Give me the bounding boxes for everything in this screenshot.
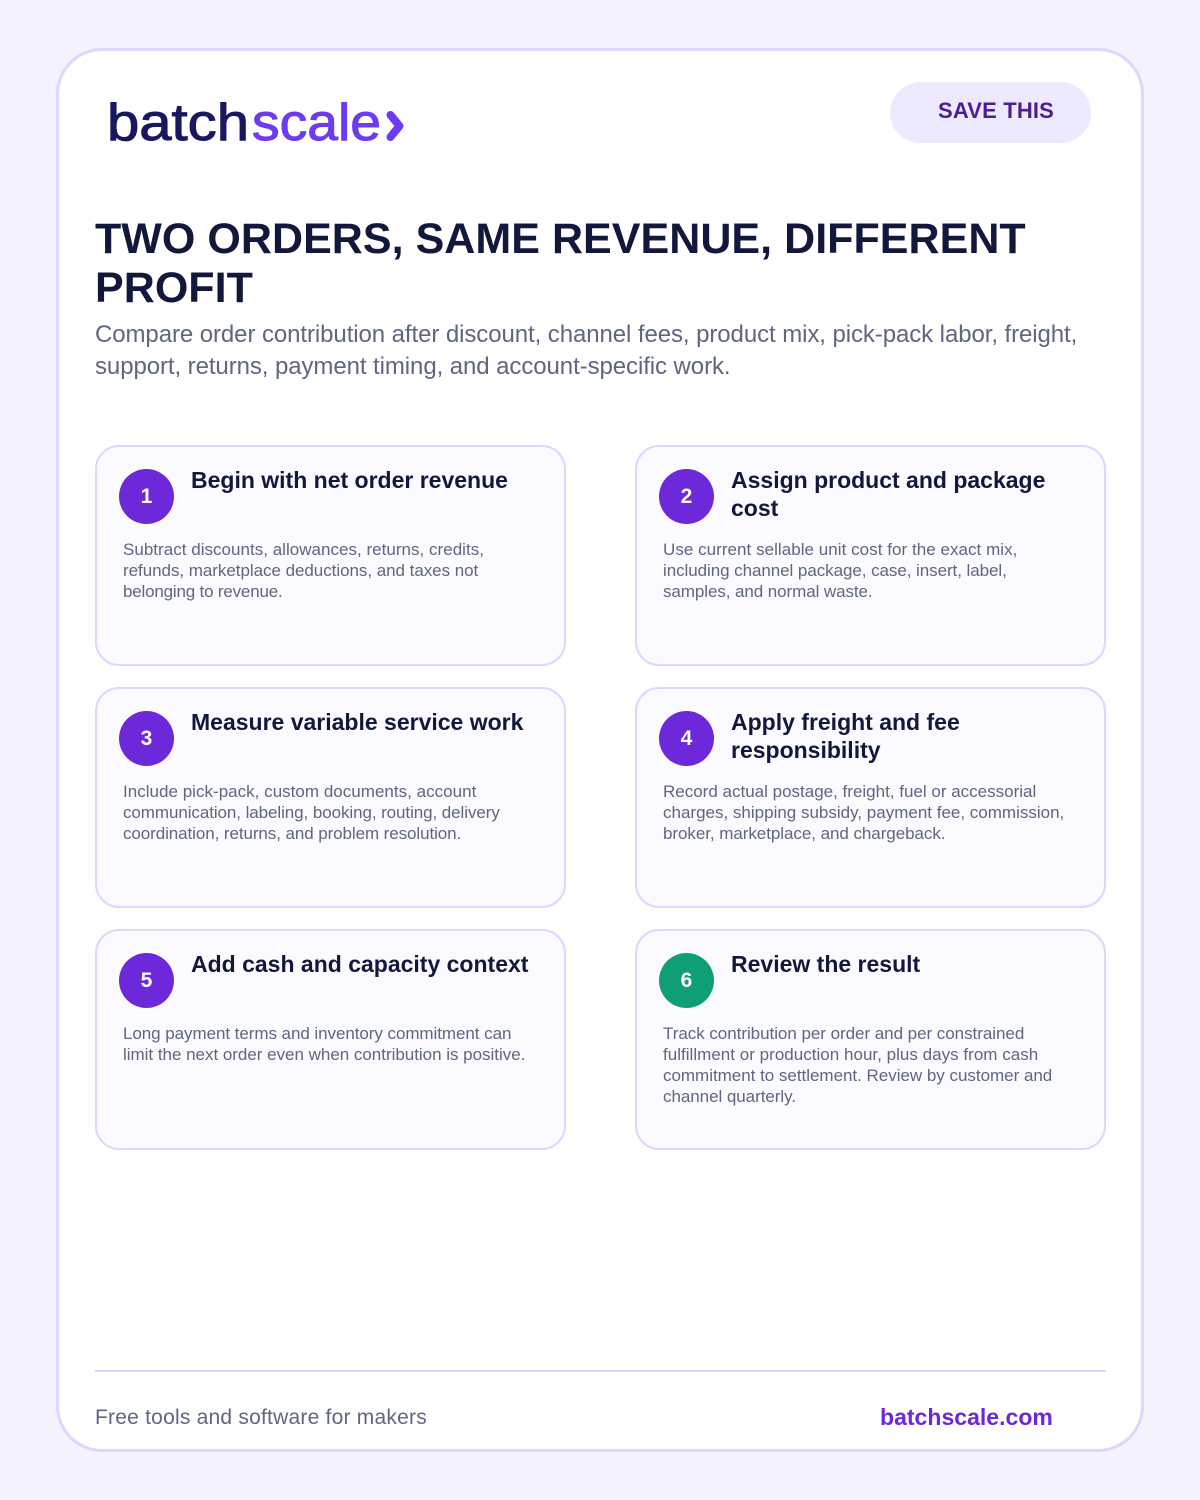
step 3 text: Include pick-pack, custom documents, account [123, 782, 476, 801]
panel: step 5 [95, 929, 566, 1150]
step 6 text: Track contribution per order and per constrained [663, 1024, 1024, 1043]
step 2 text [663, 540, 1017, 601]
step 4 text: charges, shipping subsidy, payment fee, commission, [663, 803, 1064, 822]
save this button [890, 82, 1091, 143]
step 5 text [123, 1024, 525, 1064]
step 5 number: 5 [141, 969, 152, 992]
footer url: batchscale.com [880, 1404, 1053, 1430]
step 5 number [119, 953, 174, 1008]
step 4 text: Record actual postage, freight, fuel or accessorial [663, 782, 1036, 801]
title: TWO ORDERS, SAME REVENUE, DIFFERENT [95, 215, 1026, 263]
step 3 heading: Measure variable service work [191, 709, 523, 735]
step 4 number [659, 711, 714, 766]
step 6 heading: Review the result [731, 951, 920, 977]
step 2 number [659, 469, 714, 524]
panel: step 3 [95, 687, 566, 908]
step 2 number: 2 [681, 485, 692, 508]
subtitle [95, 321, 1077, 380]
step 1 text: refunds, marketplace deductions, and taxes not [123, 561, 478, 580]
step 2 text: samples, and normal waste. [663, 582, 873, 601]
step 4 heading: responsibility [731, 737, 881, 763]
step 1 text [123, 540, 484, 601]
subtitle: Compare order contribution after discount, channel fees, product mix, pick-pack labor, freight, [95, 321, 1077, 348]
step 2 heading: cost [731, 495, 778, 521]
panel: step 1 [95, 445, 566, 666]
panel: step 4 [635, 687, 1106, 908]
step 5 text: Long payment terms and inventory commitment can [123, 1024, 511, 1043]
step 1 number [119, 469, 174, 524]
panel: step 6 [635, 929, 1106, 1150]
step 1 number: 1 [141, 485, 152, 508]
step 6 number: 6 [681, 969, 692, 992]
step 6 text: commitment to settlement. Review by customer and [663, 1066, 1052, 1085]
step 3 text: communication, labeling, booking, routing, delivery [123, 803, 500, 822]
step 1 text: Subtract discounts, allowances, returns, credits, [123, 540, 484, 559]
step 6 text [663, 1024, 1052, 1106]
step 4 heading [731, 709, 960, 763]
step 6 text: fulfillment or production hour, plus days from cash [663, 1045, 1038, 1064]
title [95, 215, 1026, 312]
step 6 text: channel quarterly. [663, 1087, 796, 1106]
panel: step 2 [635, 445, 1106, 666]
step 1 text: belonging to revenue. [123, 582, 283, 601]
step 5 heading: Add cash and capacity context [191, 951, 528, 977]
logo: batchscale [107, 94, 404, 152]
save this button: SAVE THIS [938, 98, 1054, 123]
step 6 number [659, 953, 714, 1008]
subtitle: support, returns, payment timing, and account-specific work. [95, 353, 730, 380]
step 3 number [119, 711, 174, 766]
footer tagline: Free tools and software for makers [95, 1406, 427, 1429]
logo: batchscale: batch [107, 94, 249, 152]
title: PROFIT [95, 264, 253, 312]
step 3 text: coordination, returns, and problem resolution. [123, 824, 461, 843]
step 5 text: limit the next order even when contribution is positive. [123, 1045, 525, 1064]
logo: batchscale: scale [252, 94, 381, 152]
step 3 text [123, 782, 500, 843]
step 4 text [663, 782, 1064, 843]
step 4 heading: Apply freight and fee [731, 709, 960, 735]
step 2 heading: Assign product and package [731, 467, 1045, 493]
step 4 number: 4 [681, 727, 692, 750]
step 1 heading: Begin with net order revenue [191, 467, 508, 493]
step 2 heading [731, 467, 1045, 521]
step 2 text: Use current sellable unit cost for the exact mix, [663, 540, 1017, 559]
step 3 number: 3 [141, 727, 152, 750]
step 4 text: broker, marketplace, and chargeback. [663, 824, 945, 843]
step 2 text: including channel package, case, insert, label, [663, 561, 1007, 580]
